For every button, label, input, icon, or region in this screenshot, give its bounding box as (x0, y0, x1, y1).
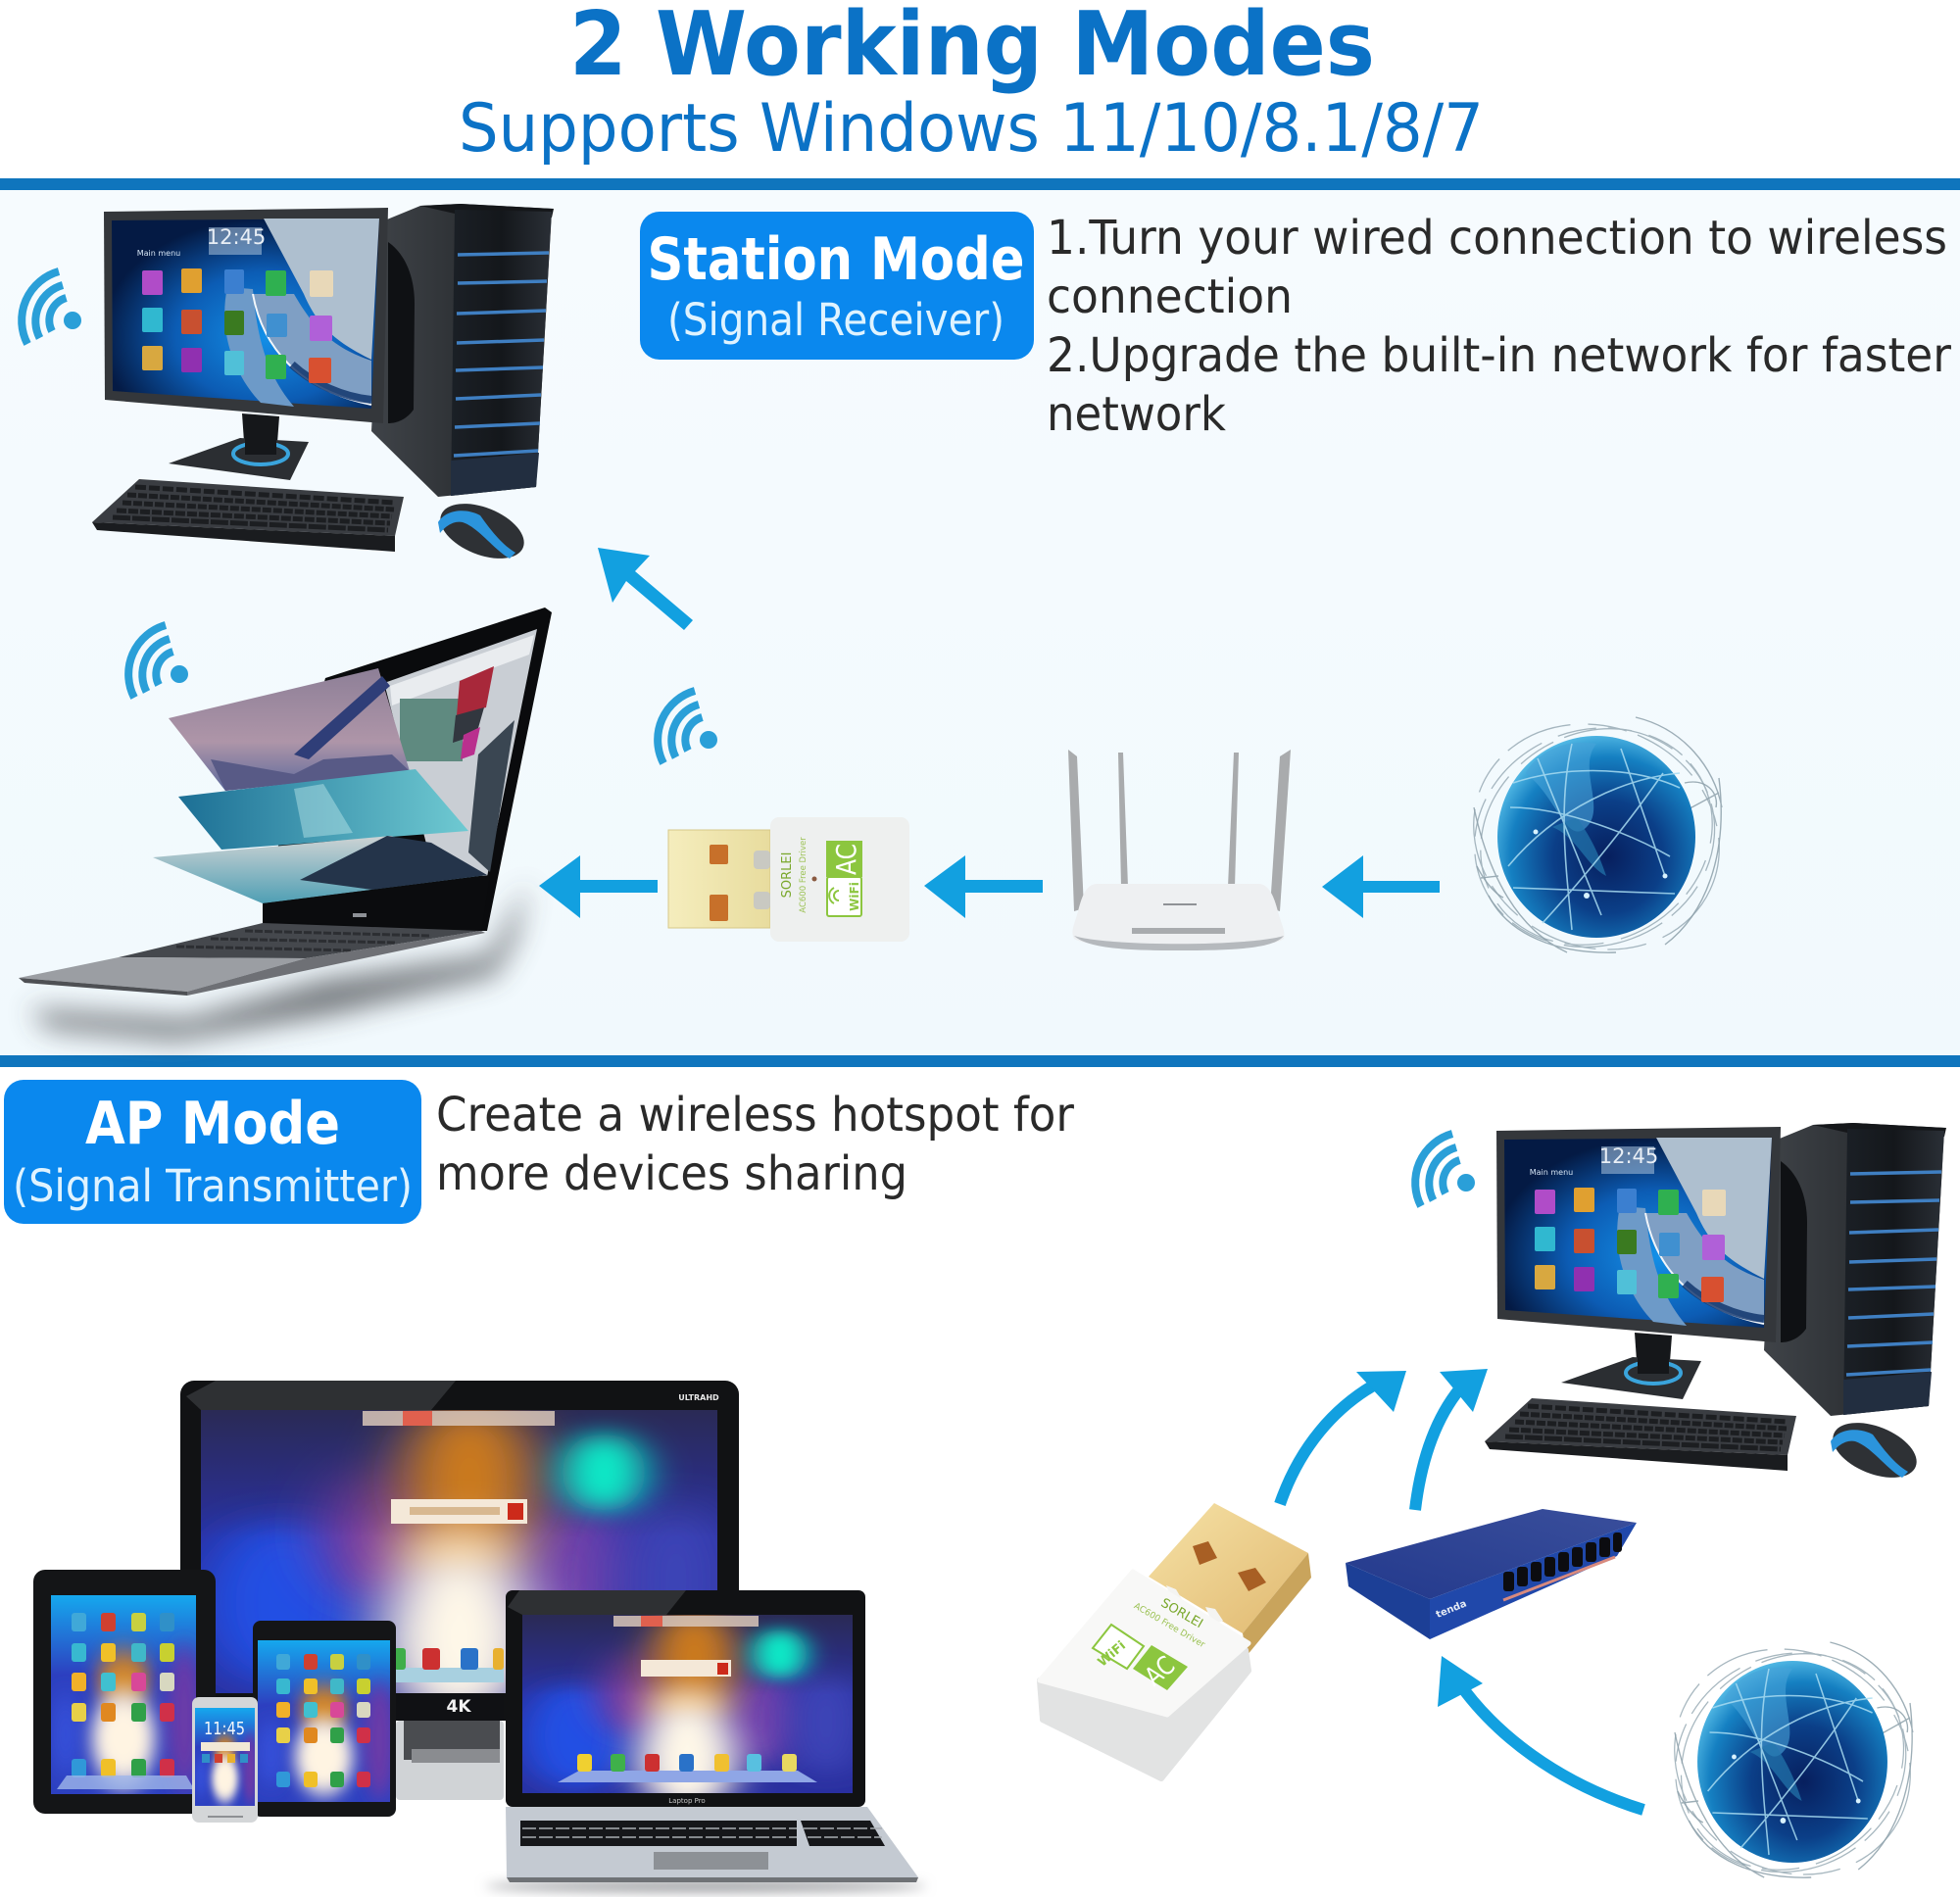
large monitor (180, 1381, 739, 1800)
panel: station mode diagram (19, 204, 1951, 1041)
laptop computer (485, 1590, 926, 1892)
arrow: dongle to laptop (539, 855, 658, 918)
icon: wifi by desktop (22, 271, 81, 344)
station mode description: connection (1047, 269, 1293, 324)
usb dongle, angled: SORLEI (1158, 1596, 1205, 1631)
internet globe (1437, 684, 1756, 990)
internet globe, ap mode (1639, 1609, 1946, 1897)
station mode description: network (1047, 387, 1226, 442)
wifi usb dongle: AC (830, 844, 862, 875)
large monitor: ULTRAHD (678, 1393, 719, 1402)
desktop computer: Main menu (137, 249, 180, 258)
panel: ap mode diagram (4, 1080, 1946, 1897)
arrow: globe to router (1322, 855, 1440, 918)
ap mode description: more devices sharing (436, 1146, 907, 1201)
desktop computer, ap mode: 12:45 (1599, 1144, 1658, 1168)
ap mode badge: AP Mode (85, 1090, 340, 1158)
laptop (19, 608, 552, 1041)
wifi usb dongle (668, 817, 909, 942)
usb dongle, angled: WiFi (1096, 1638, 1129, 1670)
network switch (1346, 1509, 1637, 1639)
arrow: to desktop (598, 548, 693, 630)
usb dongle, angled (1040, 1503, 1311, 1778)
ap mode description (436, 1088, 1074, 1201)
wifi usb dongle: AC600 Free Driver (799, 837, 808, 913)
station mode badge (640, 212, 1034, 360)
ap mode badge: (Signal Transmitter) (13, 1160, 413, 1212)
smartphone (192, 1697, 258, 1823)
desktop computer, ap mode: Main menu (1530, 1168, 1573, 1177)
desktop computer: 12:45 (207, 225, 266, 249)
smartphone: 11:45 (204, 1719, 245, 1739)
arrow: globe to switch (1438, 1656, 1643, 1810)
large monitor: 4K (446, 1697, 471, 1717)
usb dongle, angled: AC (1140, 1651, 1181, 1692)
station mode description (1047, 211, 1951, 442)
panel: station mode background (0, 190, 1960, 1056)
icon: wifi above dongle (658, 691, 717, 763)
station mode badge: (Signal Receiver) (667, 294, 1004, 346)
arrow: router to dongle (924, 855, 1043, 918)
desktop computer (92, 204, 554, 569)
arrow: dongle to desktop (1280, 1371, 1406, 1504)
ap mode description: Create a wireless hotspot for (436, 1088, 1074, 1143)
ap mode badge (4, 1080, 421, 1224)
small tablet (253, 1621, 396, 1817)
wifi usb dongle: SORLEI (780, 852, 795, 898)
laptop computer: Laptop Pro (668, 1797, 706, 1805)
network switch: tenda (1435, 1598, 1468, 1621)
arrow: switch to desktop (1415, 1369, 1488, 1510)
subtitle: Supports Windows 11/10/8.1/8/7 (459, 90, 1484, 168)
large tablet (33, 1570, 216, 1814)
icon: wifi by ap desktop (1415, 1134, 1475, 1206)
usb dongle, angled: AC600 Free Driver (1132, 1601, 1206, 1650)
wireless router (1068, 750, 1291, 950)
wifi usb dongle: WiFi (848, 882, 861, 911)
desktop computer, ap mode (1485, 1123, 1946, 1488)
icon: wifi by laptop (128, 625, 188, 698)
station mode badge: Station Mode (647, 225, 1025, 294)
